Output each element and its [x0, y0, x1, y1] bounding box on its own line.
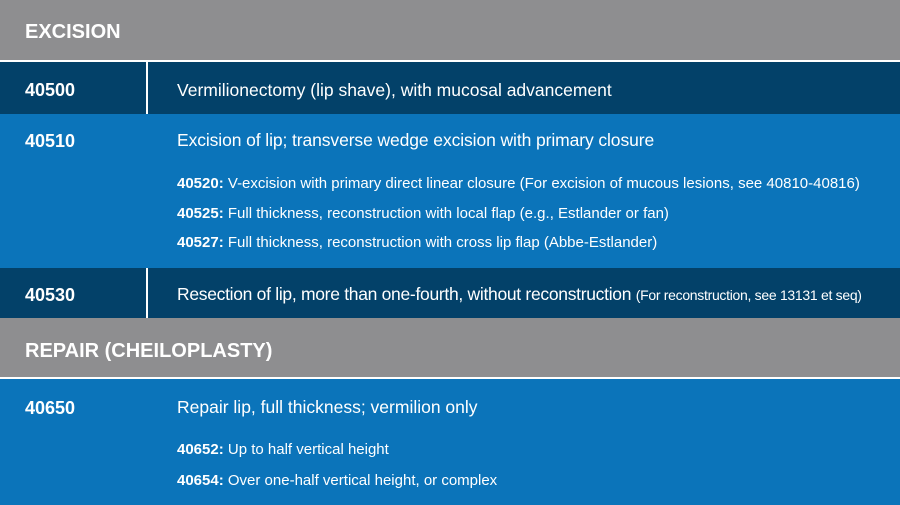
description 40650: Repair lip, full thickness; vermilion only [177, 397, 478, 417]
row: 40500 [0, 62, 900, 114]
code 40530: 40530 [25, 285, 75, 305]
row: 40650 [0, 379, 900, 505]
description 40500: Vermilionectomy (lip shave), with mucosal advancement [177, 80, 612, 100]
panel: excision header [0, 0, 900, 60]
sub 40520: 40520: V-excision with primary direct linear closure (For excision of mucous lesions, see 40810-40816) [177, 175, 860, 192]
code 40500: 40500 [25, 80, 75, 100]
sub 40525: 40525: Full thickness, reconstruction with local flap (e.g., Estlander or fan) [177, 205, 669, 222]
panel: repair header [0, 318, 900, 377]
code 40650: 40650 [25, 398, 75, 418]
description 40530: Resection of lip, more than one-fourth, without reconstruction (For reconstruction, see 13131 et seq) [177, 284, 862, 304]
row: 40510 [0, 114, 900, 268]
sub 40654: 40654: Over one-half vertical height, or complex [177, 472, 497, 489]
sub 40652: 40652: Up to half vertical height [177, 441, 389, 458]
description 40510: Excision of lip; transverse wedge excision with primary closure [177, 130, 654, 150]
heading: repair: REPAIR (CHEILOPLASTY) [25, 340, 272, 362]
code 40510: 40510 [25, 131, 75, 151]
row: 40530 [0, 268, 900, 318]
sub 40527: 40527: Full thickness, reconstruction with cross lip flap (Abbe-Estlander) [177, 234, 657, 251]
heading: excision: EXCISION [25, 21, 121, 43]
